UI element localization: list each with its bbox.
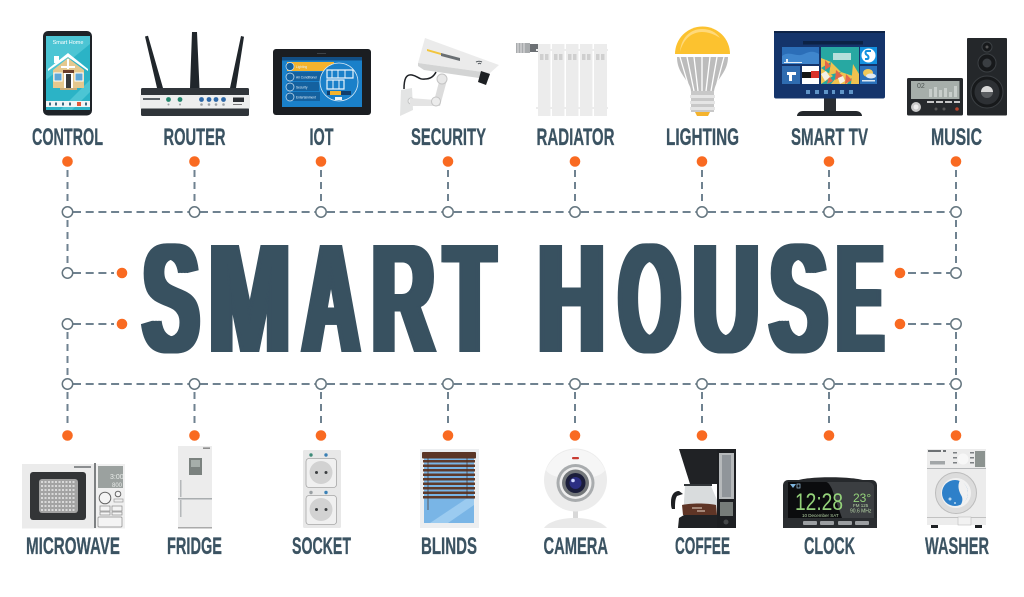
network connector lines: [68, 170, 956, 427]
top row labels: SMART TV: [791, 124, 868, 151]
icon: web camera: [544, 448, 607, 528]
icon: security camera: [400, 38, 499, 116]
icon: router: [140, 32, 250, 116]
orange endpoint dots: [62, 156, 961, 441]
icon: smartphone control: [43, 31, 92, 116]
title: S: [143, 211, 199, 385]
title: U: [692, 211, 759, 385]
icon: coffee maker: [671, 449, 736, 528]
icon: IoT tablet: Lighting: [296, 65, 307, 69]
icon: microwave: 800: [112, 483, 123, 489]
bottom row labels: CAMERA: [544, 533, 608, 560]
top row labels: MUSIC: [931, 124, 982, 151]
icon: digital clock: FM 125: [853, 503, 869, 508]
title: M: [209, 211, 290, 385]
bottom row labels: COFFEE: [675, 533, 730, 560]
icon: microwave: [22, 463, 125, 528]
bottom row labels: SOCKET: [292, 533, 351, 560]
bottom row labels: BLINDS: [421, 533, 477, 560]
icon: digital clock: 10 December SAT: [802, 513, 839, 518]
top row labels: SECURITY: [411, 124, 486, 151]
icon: smartphone control: Smart Home: [53, 40, 83, 46]
title: O: [619, 211, 680, 385]
title: R: [372, 211, 434, 385]
top row labels: RADIATOR: [536, 124, 614, 151]
icon: light bulb: [675, 26, 730, 116]
icon: IoT tablet: Entertainment: [296, 96, 316, 100]
icon: music system: 02: [917, 83, 925, 90]
icon: digital clock: 90.6 MHz: [850, 508, 872, 514]
hub nodes: [62, 207, 961, 389]
bottom row labels: FRIDGE: [167, 533, 222, 560]
icon: IoT tablet: Security: [296, 86, 308, 90]
title: E: [837, 211, 883, 385]
top row labels: IOT: [310, 124, 334, 151]
title: A: [302, 211, 359, 385]
icon: wall socket: [303, 450, 341, 528]
icon: IoT tablet: [273, 49, 371, 115]
icon: digital clock: [783, 477, 877, 528]
icon: radiator: [516, 43, 608, 116]
bottom row labels: CLOCK: [804, 533, 855, 560]
icon: fridge: [178, 446, 212, 528]
title: S: [770, 211, 827, 385]
icon: music system: [907, 38, 1007, 116]
icon: digital clock: 23°: [853, 491, 871, 505]
title: H: [538, 211, 605, 385]
icon: IoT tablet: Air Conditioner: [296, 76, 318, 80]
title: T: [445, 211, 494, 385]
bottom row labels: MICROWAVE: [26, 533, 120, 560]
top row labels: ROUTER: [164, 124, 226, 151]
icon: microwave: 3:00: [110, 474, 124, 481]
icon: window blinds: [420, 449, 479, 528]
bottom row labels: [26, 533, 989, 560]
top row labels: CONTROL: [32, 124, 103, 151]
top row labels: LIGHTING: [666, 124, 739, 151]
icon: smart TV: [774, 31, 885, 116]
icon: digital clock: 12:28: [795, 489, 843, 516]
icon: washing machine: [927, 449, 986, 528]
top row labels: [32, 124, 982, 151]
